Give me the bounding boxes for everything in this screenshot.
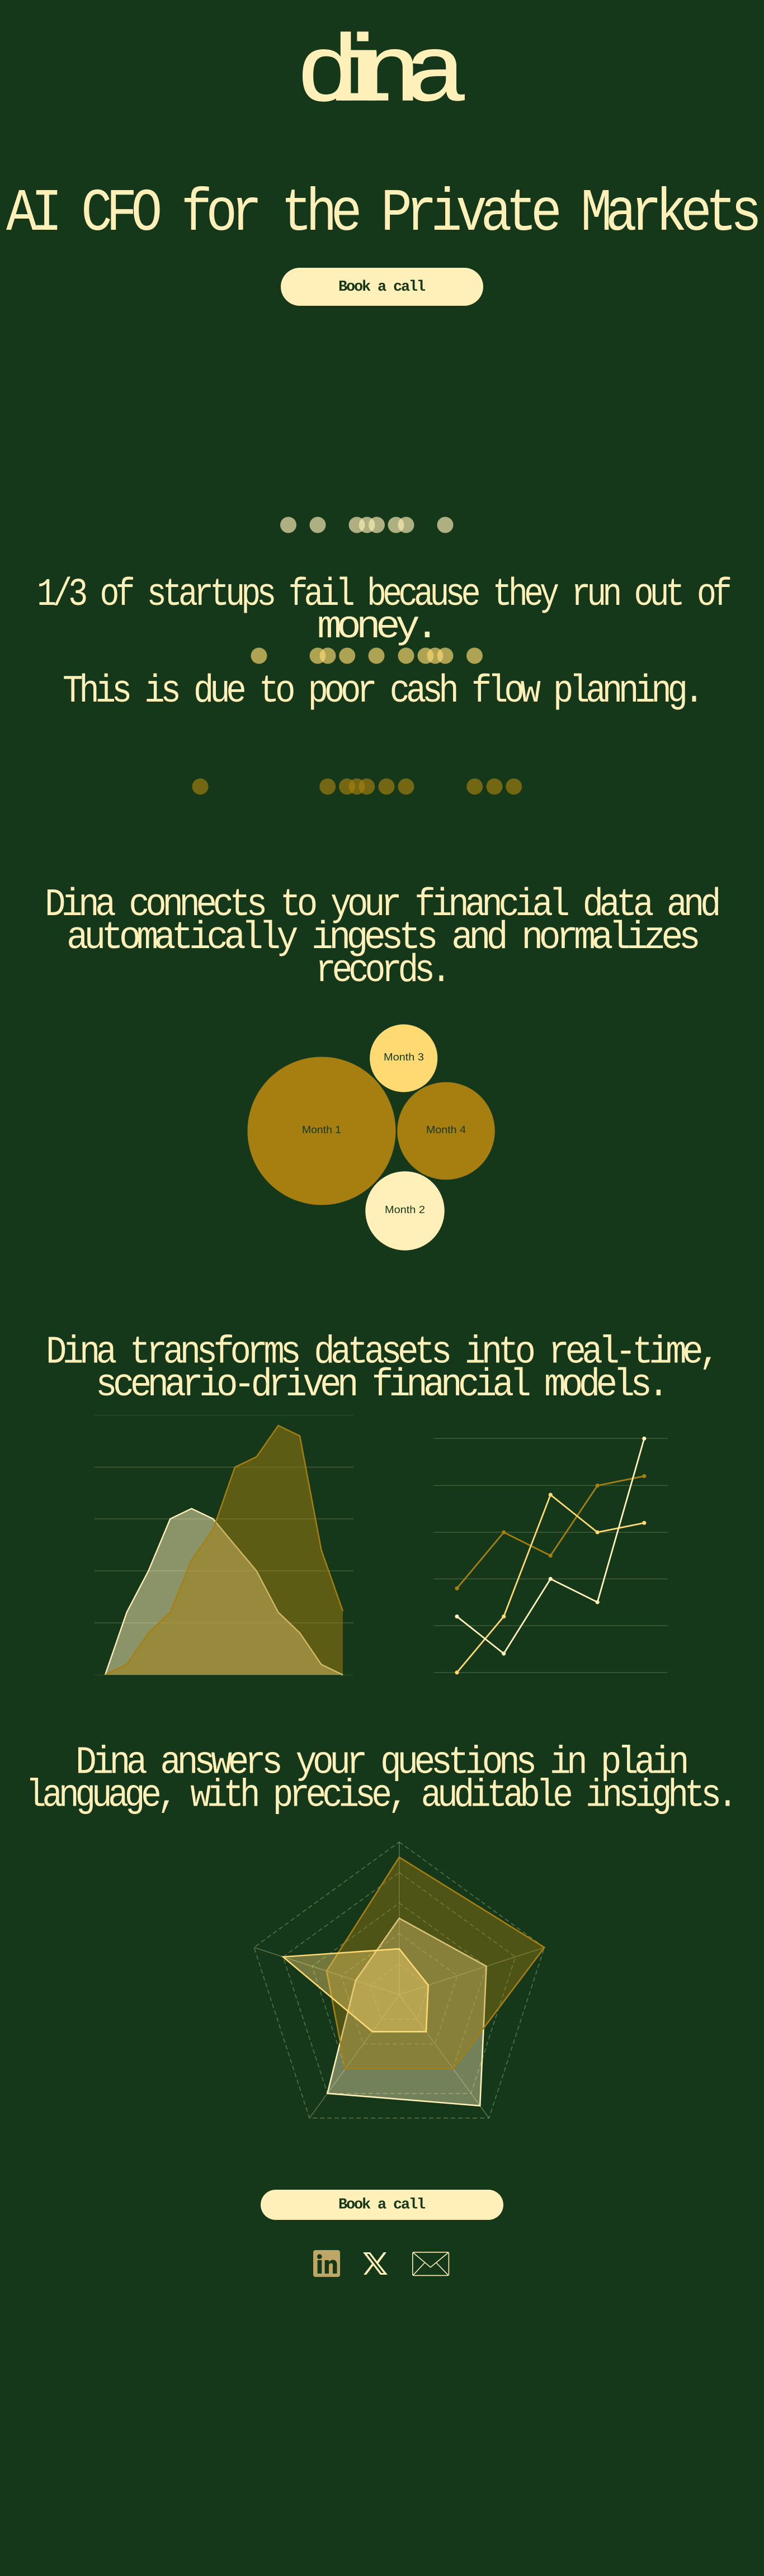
heading: transforms datasets: [46, 1330, 716, 1408]
bubble chart: [247, 1024, 495, 1251]
heading: plain language: [26, 1741, 734, 1819]
line series: gold: [455, 1474, 646, 1590]
heading: connects data: [45, 883, 718, 993]
line series: gold: [105, 1426, 343, 1675]
button: book a call bottom: Book a call: [338, 2197, 426, 2214]
line chart: [433, 1437, 668, 1674]
heading: startups fail: money.: [317, 605, 435, 650]
bubble: month 3: [370, 1024, 437, 1092]
heading: plain language: Dina answers your questions in plain: [76, 1741, 686, 1786]
heading: connects data: automatically ingests and normalizes: [67, 916, 698, 960]
button: book a call top: [281, 268, 483, 306]
heading: connects data: records.: [315, 949, 447, 993]
bubble: month 1: Month 1: [302, 1124, 341, 1135]
icon: x: [363, 2252, 388, 2275]
button: book a call top: Book a call: [338, 279, 426, 296]
heading: startups fail: [37, 573, 730, 650]
radar series: yellow: [283, 1949, 428, 2032]
dot row: gold: [192, 778, 522, 795]
icon: envelope: [413, 2252, 449, 2275]
area series: cream: [105, 1509, 343, 1675]
dot row: cream: [280, 517, 453, 533]
logo: dina: [296, 22, 468, 129]
dot row: yellow: [251, 647, 483, 664]
bubble: month 2: [365, 1171, 445, 1251]
bubble: month 3: Month 3: [384, 1052, 424, 1063]
icon: linkedin: [313, 2250, 340, 2277]
line series: yellow: [455, 1493, 646, 1674]
area series: gold: [105, 1426, 343, 1675]
bubble: month 4: Month 4: [426, 1124, 466, 1135]
area chart: [95, 1415, 353, 1675]
bubble: month 4: [397, 1082, 495, 1180]
bubble: month 1: [247, 1057, 396, 1205]
heading: transforms datasets: scenario-driven financial models.: [96, 1363, 665, 1408]
bubble: month 2: Month 2: [385, 1204, 425, 1215]
radar series: cream: [327, 1919, 487, 2106]
radar series: gold: [327, 1857, 544, 2068]
button: book a call bottom: [261, 2190, 503, 2220]
radar chart: [254, 1842, 544, 2118]
line series: cream: [105, 1509, 343, 1675]
line series: cream: [455, 1437, 646, 1656]
